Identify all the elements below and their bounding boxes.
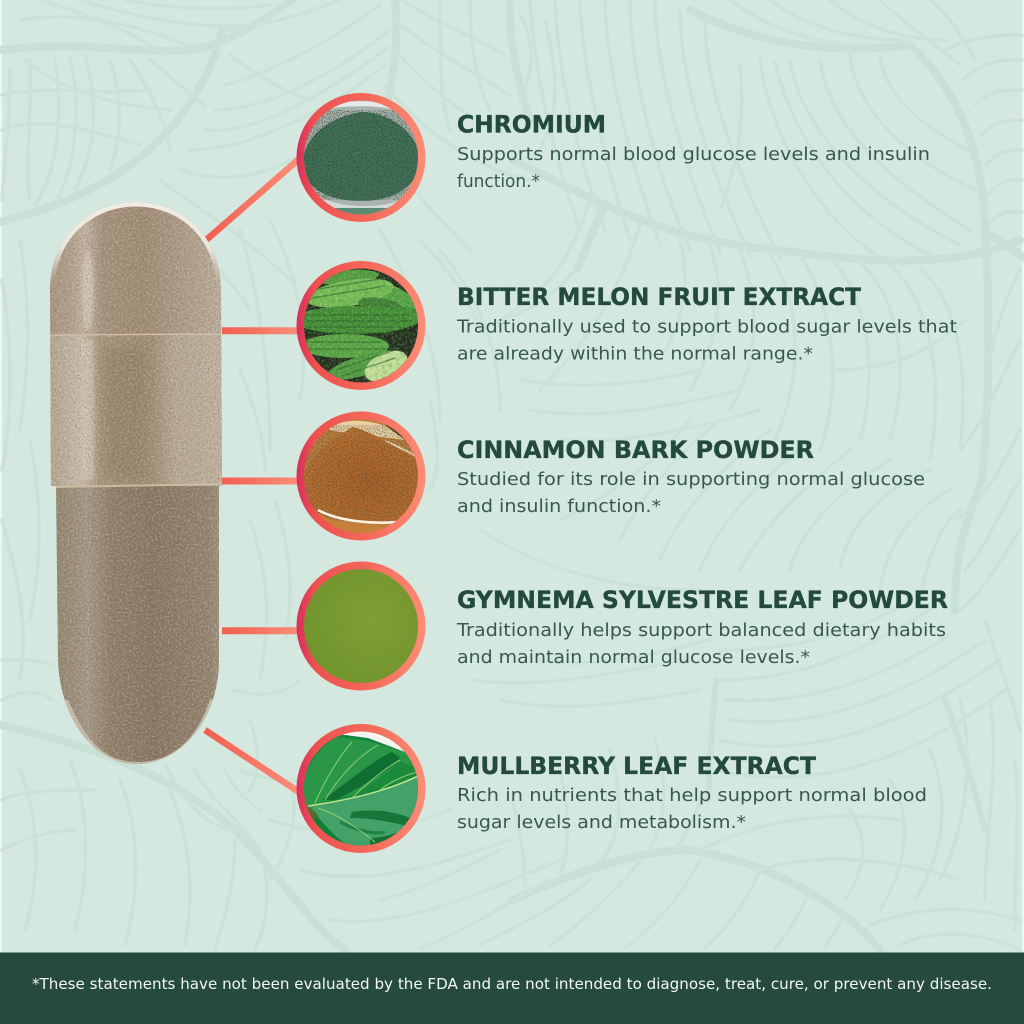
description: gymnema xyxy=(456,620,946,668)
connector lines xyxy=(205,159,299,792)
description: chromium xyxy=(457,144,930,192)
footer disclaimer: *These statements have not been evaluated by the FDA and are not intended to diagnose, treat, cure, or prevent any disease. xyxy=(32,975,992,993)
heading: gymnema: GYMNEMA SYLVESTRE LEAF POWDER xyxy=(457,586,948,614)
ring: bitter melon xyxy=(296,261,426,390)
description: cinnamon: and insulin function.* xyxy=(457,496,661,517)
heading: mullberry: MULLBERRY LEAF EXTRACT xyxy=(457,752,817,780)
description: bitter melon xyxy=(456,316,957,364)
capsule xyxy=(45,200,225,770)
description: gymnema: and maintain normal glucose levels.* xyxy=(457,647,810,668)
heading: chromium: CHROMIUM xyxy=(457,110,606,138)
connector: gymnema xyxy=(222,627,299,634)
ring: gymnema xyxy=(296,562,426,690)
description: gymnema: Traditionally helps support balanced dietary habits xyxy=(456,620,946,641)
connector: chromium xyxy=(205,159,299,241)
text block: gymnema xyxy=(456,586,948,668)
heading: cinnamon: CINNAMON BARK POWDER xyxy=(457,436,814,464)
image: gymnema powder xyxy=(304,569,418,683)
connector: mullberry xyxy=(205,730,299,792)
footer disclaimer xyxy=(0,952,1024,1024)
text block: mullberry xyxy=(457,752,927,833)
item: cinnamon xyxy=(296,412,426,545)
text block: chromium xyxy=(457,110,930,192)
item: mullberry xyxy=(296,724,426,853)
heading: bitter melon: BITTER MELON FRUIT EXTRACT xyxy=(457,283,862,311)
description: mullberry: Rich in nutrients that help support normal blood xyxy=(457,785,927,806)
text block: bitter melon xyxy=(456,283,957,364)
connector: cinnamon xyxy=(222,478,299,484)
image: cinnamon powder xyxy=(304,419,418,533)
description: mullberry: sugar levels and metabolism.* xyxy=(457,812,746,833)
image: mulberry leaf xyxy=(304,732,418,846)
item: chromium xyxy=(296,93,426,222)
description: bitter melon: Traditionally used to support blood sugar levels that xyxy=(456,316,957,338)
ring: mullberry xyxy=(296,724,426,853)
description: chromium: Supports normal blood glucose levels and insulin xyxy=(457,144,930,165)
description: bitter melon: are already within the normal range.* xyxy=(457,344,813,364)
image: bitter melons xyxy=(304,268,418,382)
text block: cinnamon xyxy=(457,436,925,517)
description: cinnamon xyxy=(457,469,925,517)
ring: chromium xyxy=(296,93,426,222)
item: gymnema xyxy=(296,562,426,690)
ring: cinnamon xyxy=(296,412,426,540)
description: cinnamon: Studied for its role in supporting normal glucose xyxy=(457,469,925,490)
image: green chromium powder xyxy=(304,100,418,214)
description: mullberry xyxy=(457,785,927,833)
item: bitter melon xyxy=(293,261,426,390)
description: chromium: function.* xyxy=(457,171,540,192)
connector: bitter melon xyxy=(222,327,299,334)
